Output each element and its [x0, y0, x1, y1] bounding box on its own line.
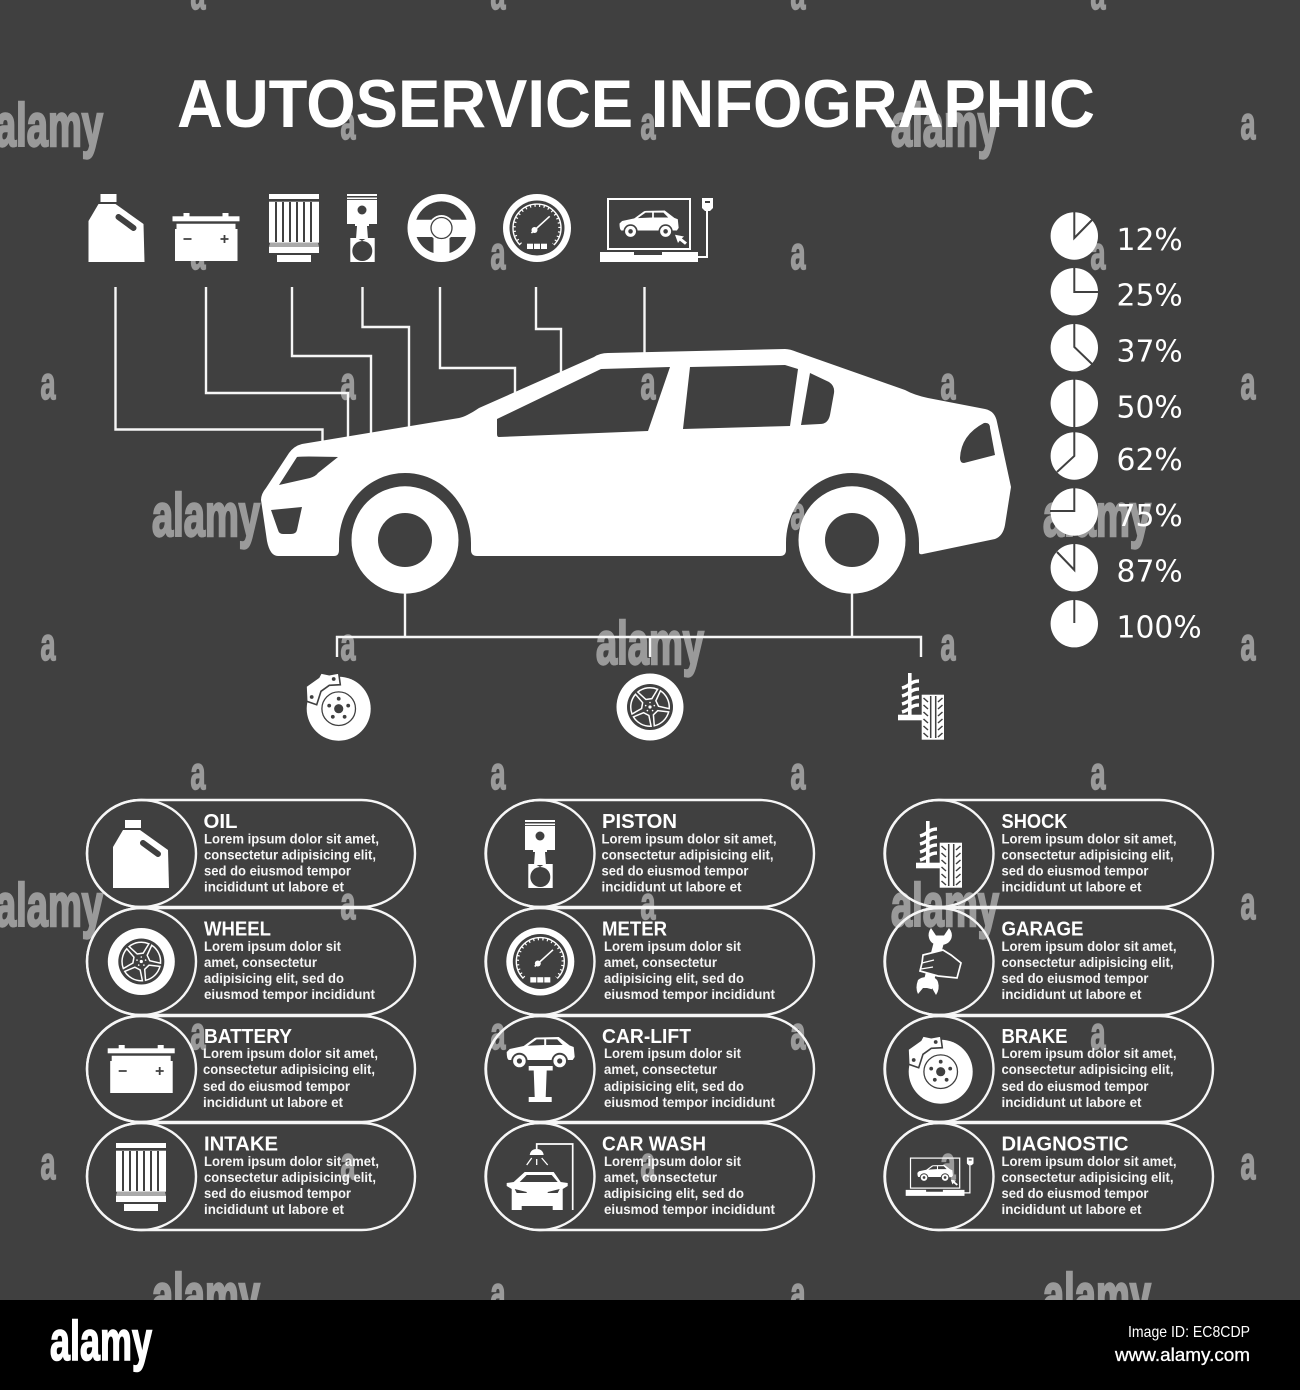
text: shock: sed do eiusmod tempor [1002, 864, 1149, 879]
text: car-lift: Lorem ipsum dolor sit [604, 1046, 741, 1061]
watermark pattern: a [190, 227, 206, 279]
pie legend: 87%: 87% [1116, 555, 1183, 590]
heading: car wash: CAR WASH [602, 1134, 706, 1156]
icon: piston [525, 820, 555, 888]
watermark pattern: alamy [0, 872, 103, 939]
watermark pattern: a [790, 487, 806, 539]
watermark pattern: alamy [152, 482, 260, 549]
text: intake: sed do eiusmod tempor [204, 1186, 352, 1201]
text: car wash: eiusmod tempor incididunt [604, 1202, 775, 1217]
pie legend: 25%: 25% [1116, 279, 1183, 314]
panel: garage [884, 908, 1213, 1015]
text: garage: consectetur adipisicing elit, [1002, 955, 1174, 970]
website: www.alamy.com [1114, 1345, 1250, 1365]
footer logo: alamy [50, 1309, 152, 1372]
pie legend: 75%: 75% [1116, 499, 1183, 534]
text: piston: consectetur adipisicing elit, [602, 848, 774, 862]
watermark pattern: a [340, 97, 356, 149]
heading: garage: GARAGE [1002, 918, 1084, 940]
text: wheel [204, 939, 375, 1002]
text: meter [604, 939, 775, 1002]
text: battery: consectetur adipisicing elit, [203, 1062, 375, 1077]
text: brake: consectetur adipisicing elit, [1002, 1062, 1174, 1077]
front wheel [352, 486, 458, 594]
panel: oil [87, 800, 415, 907]
text: shock: incididunt ut labore et [1002, 880, 1142, 895]
icon: battery [108, 1045, 175, 1093]
watermark pattern: alamy [891, 872, 999, 939]
watermark pattern: a [40, 1137, 56, 1189]
watermark pattern: a [1240, 1137, 1256, 1189]
icon: car lift [507, 1037, 575, 1102]
icon: shock absorber [898, 673, 944, 740]
icon: shock [916, 821, 962, 888]
text: intake [204, 1154, 379, 1217]
watermark pattern: a [340, 357, 356, 409]
text: car wash: amet, consectetur [604, 1170, 718, 1185]
title: AUTOSERVICE INFOGRAPHIC [177, 66, 1095, 142]
heading: car-lift: CAR-LIFT [602, 1026, 691, 1048]
text: meter: amet, consectetur [604, 955, 718, 970]
icon: meter [506, 928, 574, 996]
heading: shock: SHOCK [1002, 811, 1068, 833]
text: intake: consectetur adipisicing elit, [204, 1170, 376, 1185]
pie legend: 100%: 100% [1116, 611, 1202, 646]
watermark pattern: a [640, 357, 656, 409]
text: meter: eiusmod tempor incididunt [604, 987, 775, 1002]
panel: wheel [87, 908, 415, 1015]
icon: oil [113, 820, 169, 888]
text: oil: sed do eiusmod tempor [204, 864, 352, 879]
panel: car wash [486, 1123, 814, 1230]
watermark pattern: a [490, 227, 506, 279]
watermark pattern: a [790, 1267, 806, 1319]
watermark pattern: a [1090, 747, 1106, 799]
watermark pattern: a [490, 1007, 506, 1059]
text: garage: sed do eiusmod tempor [1002, 971, 1149, 986]
heading: battery: BATTERY [204, 1026, 293, 1048]
watermark pattern: a [1240, 97, 1256, 149]
text: shock [1002, 832, 1176, 895]
watermark pattern: alamy [0, 92, 103, 159]
pie legend: 25% [1051, 267, 1183, 315]
icon: intake filter [116, 1143, 166, 1211]
text: shock: consectetur adipisicing elit, [1002, 848, 1174, 862]
pie legend: 62%: 62% [1116, 443, 1183, 478]
text: piston: sed do eiusmod tempor [602, 864, 749, 879]
heading: wheel: WHEEL [204, 918, 271, 940]
watermark pattern: a [790, 747, 806, 799]
watermark pattern: a [340, 618, 356, 670]
text: battery [203, 1046, 378, 1110]
text: car wash: adipisicing elit, sed do [604, 1186, 744, 1201]
watermark pattern: a [940, 1137, 956, 1189]
text: battery: Lorem ipsum dolor sit amet, [203, 1046, 378, 1061]
text: wheel: adipisicing elit, sed do [204, 971, 344, 986]
text: piston [602, 832, 776, 895]
watermark pattern: alamy [1043, 1262, 1151, 1329]
text: garage [1002, 939, 1176, 1002]
watermark pattern: a [490, 1267, 506, 1319]
watermark pattern: a [340, 1137, 356, 1189]
heading: oil: OIL [204, 811, 238, 833]
watermark pattern: a [790, 1007, 806, 1059]
icon: diagnostic laptop [600, 198, 713, 262]
text: battery: sed do eiusmod tempor [203, 1079, 351, 1094]
watermark pattern: a [640, 877, 656, 929]
panel: piston [486, 800, 814, 907]
text: piston: incididunt ut labore et [602, 880, 742, 895]
panel: car-lift [486, 1016, 814, 1122]
text: oil: incididunt ut labore et [204, 880, 344, 895]
heading: piston: PISTON [602, 811, 677, 833]
text: car-lift: amet, consectetur [604, 1062, 718, 1077]
text: brake: Lorem ipsum dolor sit amet, [1002, 1046, 1176, 1061]
footer bar [0, 1300, 1300, 1390]
watermark pattern: alamy [152, 1262, 260, 1329]
text: oil: consectetur adipisicing elit, [204, 848, 376, 862]
text: car wash [604, 1154, 775, 1217]
watermark pattern: a [40, 357, 56, 409]
watermark pattern: a [790, 227, 806, 279]
panel: battery [87, 1016, 415, 1122]
panel: intake [87, 1123, 415, 1230]
icon: wrench in hand [916, 928, 961, 995]
watermark pattern: a [1240, 877, 1256, 929]
pie legend: 100% [1051, 599, 1202, 647]
text: car-lift: adipisicing elit, sed do [604, 1079, 744, 1094]
car silhouette [261, 349, 1011, 556]
icon: brake disc [306, 673, 371, 741]
text: meter: Lorem ipsum dolor sit [604, 939, 741, 954]
text: diagnostic: incididunt ut labore et [1002, 1202, 1142, 1217]
icon: diagnostic laptop [906, 1158, 974, 1196]
rear wheel [798, 486, 906, 594]
text: wheel: Lorem ipsum dolor sit [204, 939, 341, 954]
pie legend: 50% [1051, 379, 1183, 428]
image id: Image ID: EC8CDP [1128, 1324, 1250, 1341]
watermark pattern: a [940, 618, 956, 670]
panel: brake [884, 1016, 1213, 1122]
text: diagnostic: Lorem ipsum dolor sit amet, [1002, 1154, 1176, 1169]
watermark pattern: a [640, 1137, 656, 1189]
text: oil: Lorem ipsum dolor sit amet, [204, 832, 379, 846]
pie legend: 37% [1051, 323, 1183, 371]
heading: diagnostic: DIAGNOSTIC [1002, 1134, 1128, 1156]
text: car wash: Lorem ipsum dolor sit [604, 1154, 741, 1169]
pie legend: 37%: 37% [1116, 335, 1183, 370]
connector lines: wheels to bottom icons [337, 593, 921, 657]
watermark pattern: alamy [891, 92, 999, 159]
watermark pattern: a [490, 487, 506, 539]
icon: battery [172, 213, 240, 261]
watermark pattern: alamy [596, 610, 704, 677]
text: intake: incididunt ut labore et [204, 1202, 344, 1217]
text: meter: adipisicing elit, sed do [604, 971, 744, 986]
text: car-lift: eiusmod tempor incididunt [604, 1095, 775, 1110]
text: piston: Lorem ipsum dolor sit amet, [602, 832, 776, 846]
icon: alloy wheel [616, 674, 684, 740]
watermark pattern: a [1090, 1007, 1106, 1059]
icon: piston [347, 194, 377, 262]
pie legend: 87% [1051, 543, 1183, 591]
icon: wheel [108, 928, 175, 995]
watermark pattern: a [40, 618, 56, 670]
text: diagnostic [1002, 1154, 1176, 1217]
watermark pattern: a [190, 747, 206, 799]
text: diagnostic: sed do eiusmod tempor [1002, 1186, 1149, 1201]
watermark pattern: a [640, 97, 656, 149]
text: diagnostic: consectetur adipisicing elit, [1002, 1170, 1174, 1185]
text: wheel: amet, consectetur [204, 955, 318, 970]
watermark pattern: a [340, 877, 356, 929]
pie legend: 50%: 50% [1116, 390, 1183, 425]
panel: shock [884, 800, 1213, 907]
heading: brake: BRAKE [1002, 1026, 1068, 1048]
icon: steering wheel [408, 194, 476, 262]
text: intake: Lorem ipsum dolor sit amet, [204, 1154, 379, 1169]
icon: car wash [507, 1144, 573, 1210]
pie legend: 12%: 12% [1116, 223, 1183, 258]
watermark pattern: a [1090, 227, 1106, 279]
pie legend: 75% [1050, 487, 1183, 536]
watermark pattern: a [190, 1007, 206, 1059]
panel: meter [486, 908, 814, 1015]
text: garage: incididunt ut labore et [1002, 987, 1142, 1002]
icon: air filter [269, 194, 319, 262]
text: wheel: eiusmod tempor incididunt [204, 987, 375, 1002]
connector lines: top icons to car [116, 287, 644, 441]
text: oil [204, 832, 379, 895]
heading: intake: INTAKE [204, 1134, 278, 1156]
heading: meter: METER [602, 918, 668, 940]
pie legend: 12% [1051, 211, 1183, 260]
watermark pattern: a [940, 357, 956, 409]
pie legend: 62% [1051, 431, 1183, 480]
text: brake: incididunt ut labore et [1002, 1095, 1142, 1110]
text: car-lift [604, 1046, 775, 1110]
watermark pattern: alamy [1043, 482, 1151, 549]
text: garage: Lorem ipsum dolor sit amet, [1002, 939, 1176, 954]
icon: brake [908, 1036, 973, 1104]
panel: diagnostic [884, 1123, 1213, 1230]
watermark pattern: a [490, 747, 506, 799]
watermark pattern: a [1240, 357, 1256, 409]
icon: oil canister [88, 194, 144, 262]
icon: speedometer [503, 194, 571, 262]
text: brake [1002, 1046, 1176, 1110]
text: battery: incididunt ut labore et [203, 1095, 343, 1110]
text: brake: sed do eiusmod tempor [1002, 1079, 1149, 1094]
watermark pattern: a [1240, 618, 1256, 670]
text: shock: Lorem ipsum dolor sit amet, [1002, 832, 1176, 846]
